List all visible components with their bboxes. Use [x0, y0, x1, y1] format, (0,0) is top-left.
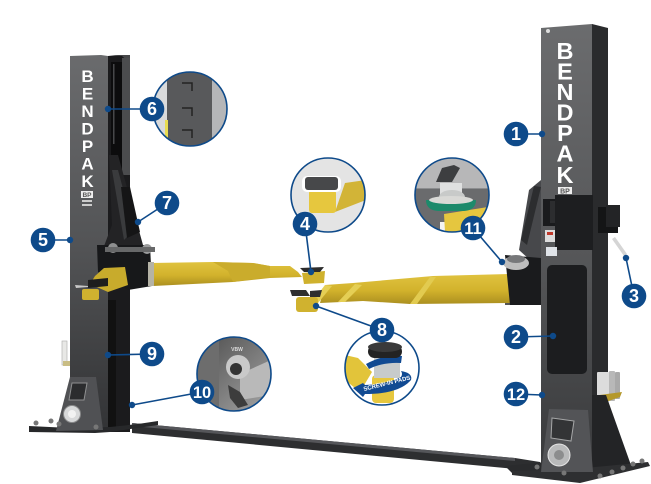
- right carriage: [505, 255, 541, 305]
- callout 7: [135, 191, 179, 225]
- right column front face: [541, 24, 592, 472]
- left bracket pin: [62, 341, 67, 365]
- callout 8: [313, 303, 394, 342]
- inset: lock detail 10: [197, 337, 271, 411]
- callout 7: 7: [162, 193, 172, 213]
- callout 6: 6: [147, 99, 157, 119]
- power unit motor: [543, 195, 627, 256]
- callout 12: [504, 382, 545, 406]
- floor bar: [132, 423, 545, 473]
- left arm pad: [302, 271, 325, 284]
- callout 5: 5: [38, 230, 48, 250]
- screw-in pads label: SCREW-IN PADS: [363, 375, 411, 393]
- handle: [612, 237, 627, 256]
- inset: equalizer 11: [415, 158, 490, 234]
- right side gusset: [519, 180, 541, 260]
- callout 11: 11: [464, 220, 482, 238]
- left column small logo: BP: [82, 192, 92, 199]
- callout 4: [293, 212, 317, 275]
- right arm pad: [296, 297, 318, 312]
- left carriage: [97, 245, 152, 290]
- callout 1: 1: [511, 124, 521, 144]
- callout 11: [461, 216, 505, 265]
- inset: slot detail 6: [154, 71, 228, 147]
- inset: arm pad 4: [290, 157, 366, 233]
- callout 9: [105, 342, 164, 366]
- fluid bottles: [592, 371, 622, 404]
- callout 4: 4: [300, 214, 310, 234]
- right column logo: BENDPAK: [557, 38, 574, 188]
- inset: lock detail 10: VBW: [231, 347, 243, 353]
- left arm: [75, 262, 325, 300]
- right column small logo: BP: [560, 188, 570, 196]
- callout 12: 12: [507, 386, 525, 404]
- right column small logo: [558, 187, 572, 196]
- callout 8: 8: [377, 320, 387, 340]
- callout 10: 10: [193, 384, 211, 402]
- callout 3: [622, 255, 646, 308]
- left gusset: [98, 155, 143, 262]
- callout 1: [504, 122, 545, 146]
- inset: screw-in pads 8: [345, 331, 419, 405]
- left column front face: [70, 55, 108, 432]
- right column: [503, 24, 627, 472]
- left column channel: [108, 55, 130, 432]
- left base: [29, 341, 158, 433]
- left column logo: BENDPAK: [81, 67, 94, 191]
- right arm: [290, 274, 530, 312]
- right column side face: [592, 24, 608, 470]
- callout 9: 9: [147, 344, 157, 364]
- right base: [512, 395, 650, 483]
- callout 10: [129, 380, 214, 408]
- left arm inner box: [90, 267, 128, 292]
- callout 2: 2: [511, 327, 521, 347]
- callout 5: [31, 228, 73, 252]
- power unit tank: [547, 265, 587, 374]
- callout 3: 3: [629, 286, 639, 306]
- left column small logo: [81, 191, 93, 206]
- left column: [70, 55, 155, 432]
- callout 6: [105, 97, 164, 121]
- callout 2: [504, 325, 556, 349]
